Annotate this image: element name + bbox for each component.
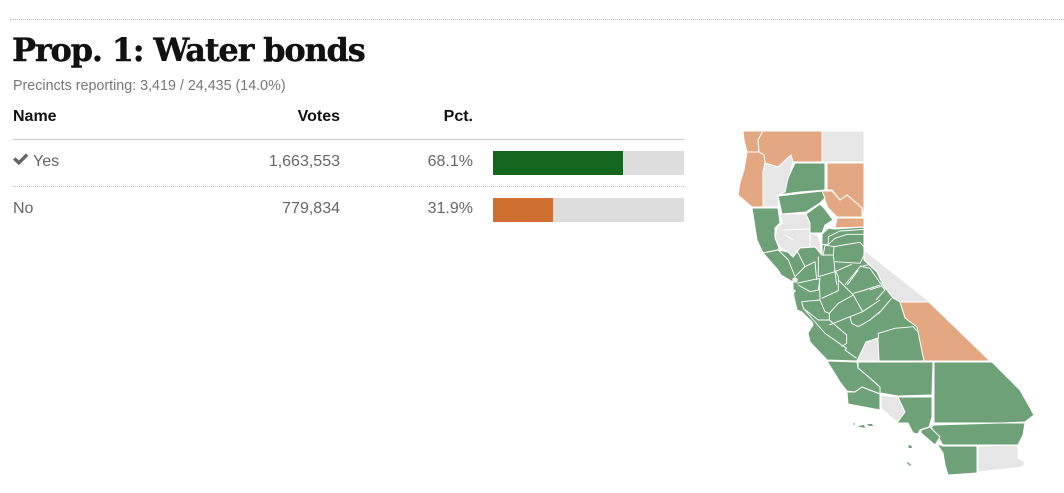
column header: name: Name bbox=[13, 108, 57, 125]
no percent: 31.9% bbox=[428, 200, 473, 217]
icon: san francisco bay bbox=[792, 277, 798, 293]
column header: votes: Votes bbox=[298, 108, 340, 125]
northern county boundary lines bbox=[778, 226, 870, 285]
row: no bbox=[13, 198, 684, 222]
no label: No bbox=[13, 200, 33, 217]
yes votes: 1,663,553 bbox=[269, 153, 340, 170]
row: yes bbox=[13, 151, 684, 175]
gray counties (no data) bbox=[763, 131, 1025, 472]
no votes: 779,834 bbox=[282, 200, 340, 217]
icon: check mark bbox=[13, 154, 28, 166]
yes bar bbox=[493, 151, 684, 175]
results table bbox=[13, 108, 684, 222]
precincts reporting text: Precincts reporting: 3,419 / 24,435 (14.0%) bbox=[13, 78, 286, 94]
yes percent: 68.1% bbox=[428, 153, 473, 170]
no bar bbox=[493, 198, 684, 222]
central valley county boundary lines bbox=[797, 270, 880, 358]
column header: percent: Pct. bbox=[444, 108, 473, 125]
title: Prop. 1: Water bonds bbox=[12, 31, 365, 69]
orange counties (no) bbox=[738, 131, 990, 361]
top dotted rule bbox=[10, 19, 1064, 20]
yes label: Yes bbox=[33, 153, 59, 170]
channel islands bbox=[853, 423, 912, 466]
sierra county boundary lines bbox=[860, 266, 917, 338]
green counties (yes) bbox=[752, 163, 1034, 475]
